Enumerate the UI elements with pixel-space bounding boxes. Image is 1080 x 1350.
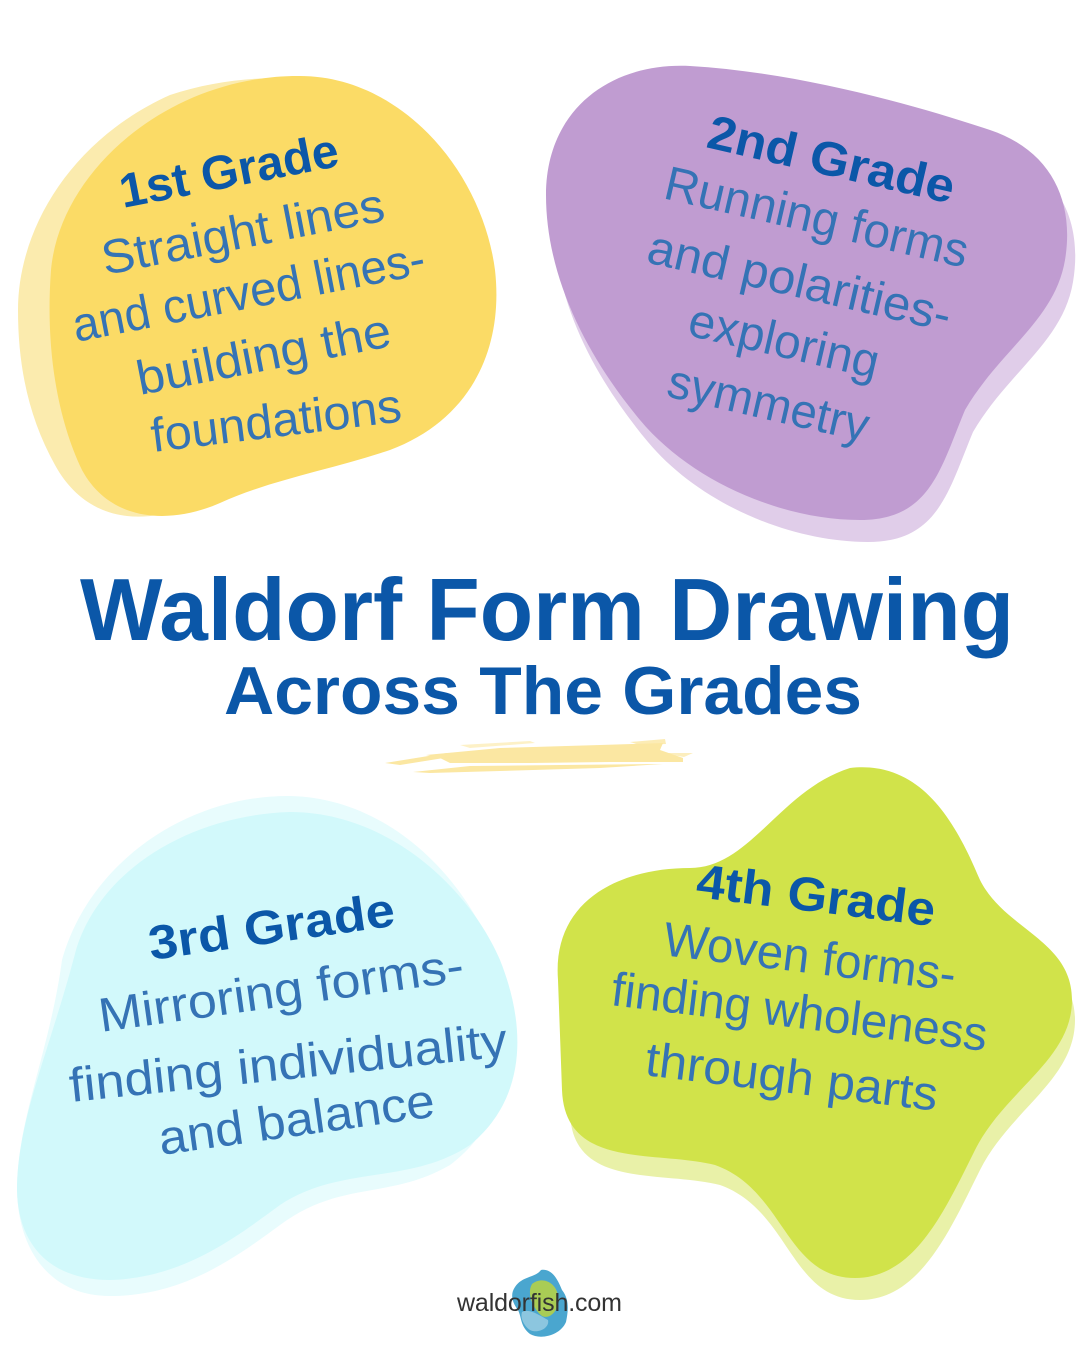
text: 3rd grade description: and balance bbox=[155, 1075, 438, 1166]
text: 1st grade description: foundations bbox=[148, 380, 404, 463]
text: 2nd grade description bbox=[643, 157, 974, 453]
text: 4th grade description: Woven forms- bbox=[661, 913, 959, 1002]
text: 4th grade description: finding wholeness bbox=[609, 963, 990, 1062]
heading: 2nd Grade: 2nd Grade bbox=[703, 106, 960, 214]
heading: 1st Grade: 1st Grade bbox=[115, 124, 343, 219]
text: 2nd grade description: symmetry bbox=[663, 355, 874, 453]
panel: 4th grade bbox=[558, 767, 1075, 1300]
title bbox=[80, 560, 1014, 729]
text: 3rd grade description bbox=[67, 939, 510, 1166]
panel: 3rd grade bbox=[17, 796, 517, 1296]
text: 1st grade description bbox=[68, 179, 430, 463]
text: 1st grade description: Straight lines bbox=[97, 179, 389, 286]
blob: yellow shape bbox=[18, 76, 496, 517]
icon: watercolor splash bbox=[512, 1270, 568, 1337]
blob: cyan shape bbox=[17, 796, 517, 1296]
heading: 3rd Grade: 3rd Grade bbox=[145, 884, 398, 971]
text: 3rd grade description: Mirroring forms- bbox=[95, 939, 467, 1043]
text: 4th grade description: through parts bbox=[643, 1033, 941, 1122]
text: 1st grade description: and curved lines- bbox=[68, 232, 430, 353]
title line 2: Across The Grades bbox=[224, 653, 862, 729]
text: 3rd grade description: finding individuality bbox=[67, 1014, 510, 1113]
text: waldorfish.com: waldorfish.com bbox=[456, 1289, 622, 1317]
text: 4th grade description bbox=[609, 913, 990, 1122]
title line 1: Waldorf Form Drawing bbox=[80, 560, 1014, 659]
blob: green shape bbox=[558, 767, 1075, 1300]
text: 2nd grade description: Running forms bbox=[660, 157, 974, 278]
text: 2nd grade description: exploring bbox=[684, 294, 884, 389]
heading: 4th Grade: 4th Grade bbox=[694, 855, 938, 937]
blob: purple shape bbox=[546, 66, 1075, 542]
text: 2nd grade description: and polarities- bbox=[643, 221, 957, 342]
panel: 1st grade bbox=[18, 76, 496, 517]
brush stroke underline bbox=[385, 739, 693, 773]
panel: 2nd grade bbox=[546, 66, 1075, 542]
text: 1st grade description: building the bbox=[132, 305, 395, 406]
logo: waldorfish.com bbox=[456, 1270, 622, 1337]
